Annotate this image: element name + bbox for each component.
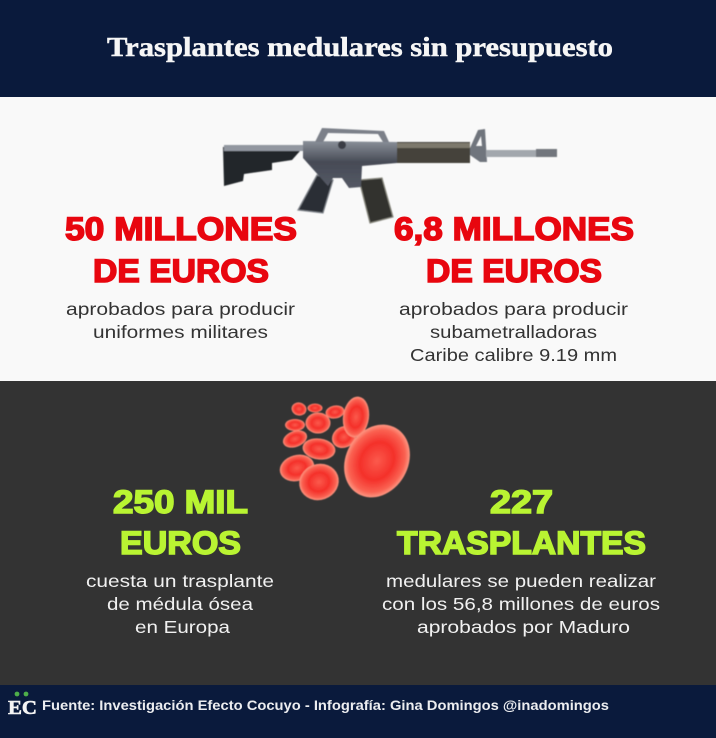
stat: 50 millones: 50 MILLONES bbox=[65, 211, 297, 247]
stat: 50 millones: DE EUROS bbox=[93, 253, 269, 289]
stat: 250 mil euros: cuesta un trasplante bbox=[86, 571, 274, 591]
stat: 50 millones: uniformes militares bbox=[93, 322, 268, 342]
footer band bbox=[0, 685, 716, 738]
stat: 250 mil euros: 250 MIL bbox=[113, 484, 248, 520]
stat: 250 mil euros bbox=[86, 484, 274, 637]
panel: military spending bbox=[0, 97, 716, 381]
stat: 50 millones bbox=[65, 211, 297, 342]
icon: Efecto Cocuyo logo: EC bbox=[8, 697, 37, 719]
stat: 250 mil euros: en Europa bbox=[135, 617, 230, 637]
source credit: Fuente: Investigación Efecto Cocuyo - Infografía: Gina Domingos @inadomingos bbox=[42, 698, 609, 713]
stat: 6,8 millones: subametralladoras bbox=[430, 322, 597, 342]
stat: 6,8 millones: Caribe calibre 9.19 mm bbox=[410, 345, 617, 365]
stat: 227 trasplantes: aprobados por Maduro bbox=[417, 617, 630, 637]
stat: 227 trasplantes: medulares se pueden realizar bbox=[386, 571, 656, 591]
stat: 6,8 millones bbox=[394, 211, 634, 365]
title: Trasplantes medulares sin presupuesto bbox=[107, 32, 613, 62]
stat: 250 mil euros: EUROS bbox=[120, 525, 241, 561]
stat: 50 millones: aprobados para producir bbox=[66, 299, 295, 319]
icon: rifle bbox=[223, 128, 557, 223]
panel: transplants bbox=[0, 381, 716, 685]
stat: 6,8 millones: 6,8 MILLONES bbox=[394, 211, 634, 247]
stat: 227 trasplantes bbox=[382, 484, 660, 637]
stat: 6,8 millones: aprobados para producir bbox=[399, 299, 628, 319]
icon: red blood cells bbox=[277, 395, 423, 509]
header band bbox=[0, 0, 716, 97]
stat: 227 trasplantes: TRASPLANTES bbox=[397, 525, 646, 561]
stat: 250 mil euros: de médula ósea bbox=[107, 594, 253, 614]
stat: 227 trasplantes: 227 bbox=[490, 484, 553, 520]
stat: 6,8 millones: DE EUROS bbox=[426, 253, 602, 289]
stat: 227 trasplantes: con los 56,8 millones de euros bbox=[382, 594, 660, 614]
